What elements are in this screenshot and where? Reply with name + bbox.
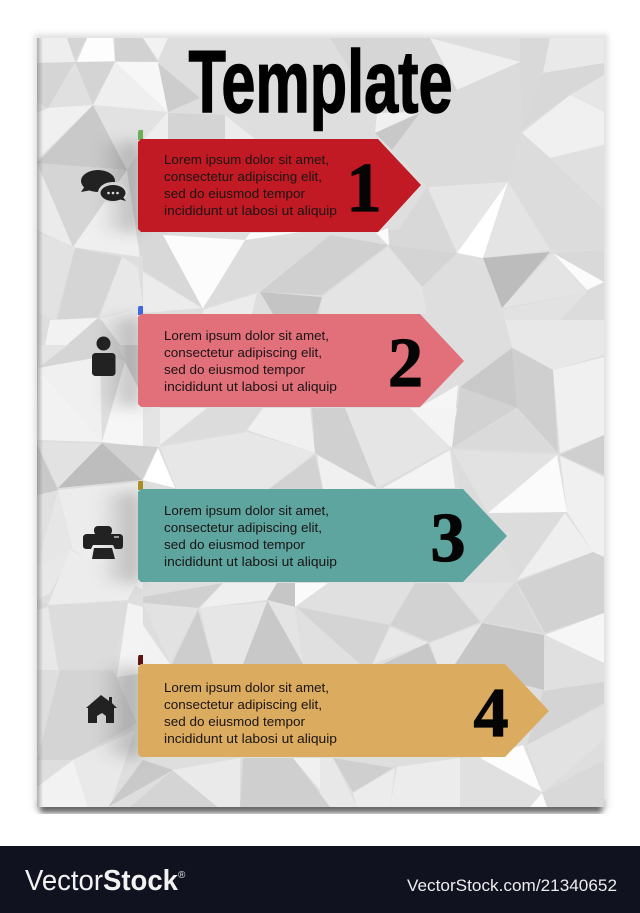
number 4: 4 <box>474 675 508 752</box>
text: step 4 description: consectetur adipiscing elit, <box>164 697 322 712</box>
text: step 3 description: Lorem ipsum dolor sit amet, <box>164 503 329 518</box>
shadow: fold strip beside the banners <box>98 142 140 757</box>
text: step 4 description: Lorem ipsum dolor sit amet, <box>164 680 329 695</box>
text: step 4 description: incididunt ut labosi ut aliquip <box>164 731 337 746</box>
panel: step 1 <box>138 130 421 232</box>
text: step 2 description <box>164 328 337 394</box>
text: step 2 description: consectetur adipiscing elit, <box>164 345 322 360</box>
icon: chat bubbles <box>81 170 128 203</box>
text: step 3 description <box>164 503 337 569</box>
text: step 1 description: Lorem ipsum dolor sit amet, <box>164 152 329 167</box>
panel: low-poly grey background <box>37 38 604 807</box>
icon: house <box>86 695 117 723</box>
text: step 1 description: consectetur adipiscing elit, <box>164 169 322 184</box>
text: step 2 description: Lorem ipsum dolor sit amet, <box>164 328 329 343</box>
icon: printer <box>83 526 123 559</box>
number 1: 1 <box>346 150 382 227</box>
number 3: 3 <box>430 500 466 577</box>
panel: step 2 <box>138 306 464 407</box>
image id: VectorStock.com/21340652 <box>407 876 617 895</box>
text: step 1 description <box>164 152 337 218</box>
panel: step 3 <box>138 481 507 582</box>
title: Template <box>188 32 452 131</box>
registered mark: ® <box>178 870 186 881</box>
text: step 3 description: consectetur adipiscing elit, <box>164 520 322 535</box>
logo: VectorStock: VectorStock <box>25 865 179 897</box>
number 2: 2 <box>388 325 423 402</box>
panel: step 4 <box>138 655 549 757</box>
footer bar <box>0 846 640 913</box>
text: step 3 description: incididunt ut labosi ut aliquip <box>164 554 337 569</box>
text: step 1 description: sed do eiusmod tempor <box>164 186 306 201</box>
page drop shadow <box>34 34 608 813</box>
text: step 3 description: sed do eiusmod tempor <box>164 537 306 552</box>
text: step 2 description: incididunt ut labosi ut aliquip <box>164 379 337 394</box>
text: step 2 description: sed do eiusmod tempor <box>164 362 306 377</box>
text: step 4 description <box>164 680 337 746</box>
text: step 1 description: incididunt ut labosi ut aliquip <box>164 203 337 218</box>
icon: person <box>92 336 116 376</box>
text: step 4 description: sed do eiusmod tempor <box>164 714 306 729</box>
